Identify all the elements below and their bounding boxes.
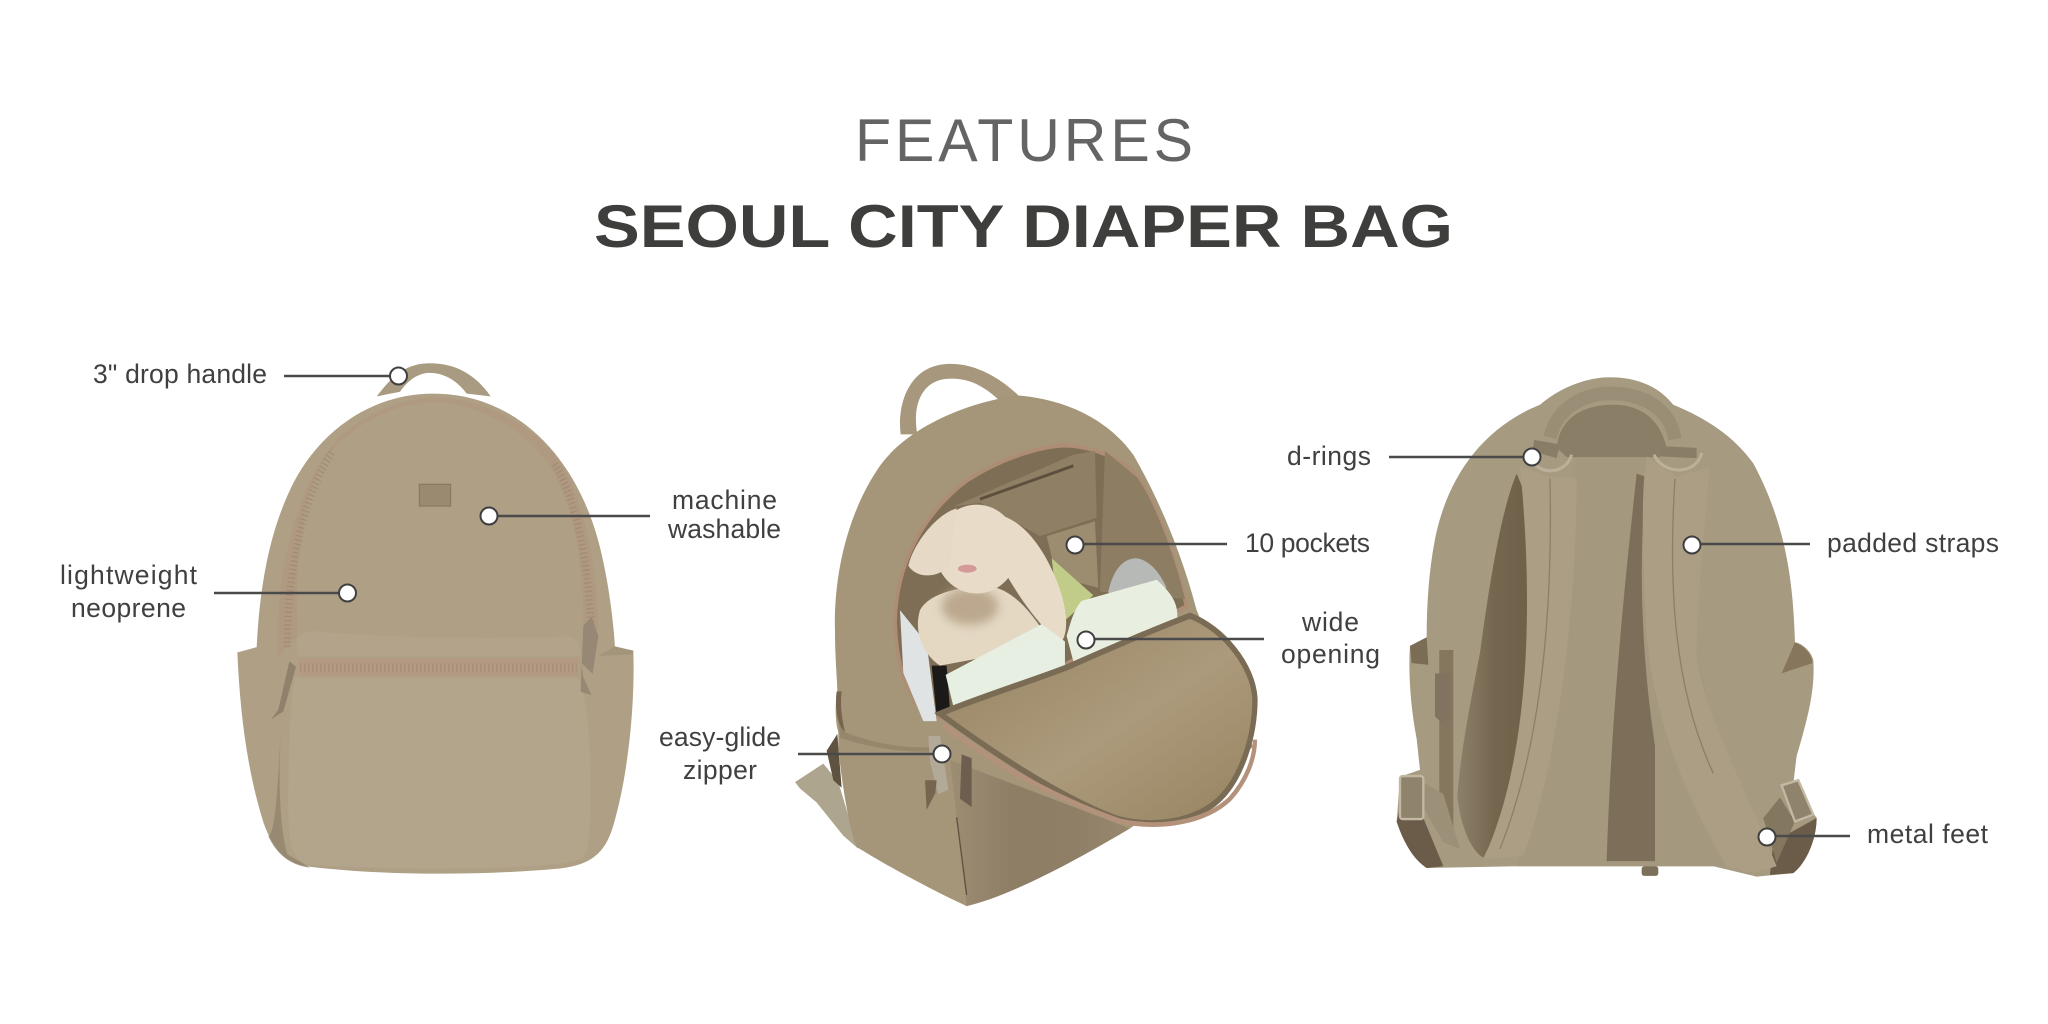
left d-ring [1530, 440, 1572, 471]
bunny toy [908, 505, 1066, 666]
body [237, 394, 634, 874]
callout: wide opening [1078, 607, 1380, 669]
interior [895, 445, 1187, 717]
leader line [1767, 835, 1850, 837]
right zipper pull [581, 617, 598, 695]
wipes [1052, 558, 1093, 625]
side pocket lip [836, 692, 931, 752]
middle shadow gap [1607, 474, 1655, 861]
bunny right ear [990, 514, 1066, 642]
flap zipper [943, 725, 1255, 825]
handle [900, 364, 1019, 434]
marker [1684, 536, 1700, 554]
right zipper teeth [553, 461, 591, 622]
inner upper pocket edge [980, 466, 1073, 499]
left strap seam [1500, 479, 1550, 849]
top pocket roll [296, 631, 580, 656]
label line two: opening [1281, 639, 1380, 669]
left pocket opening [1410, 637, 1428, 665]
marker [934, 746, 950, 762]
feet dark left [1397, 808, 1443, 868]
title: features: FEATURES [855, 107, 1197, 174]
open view backpack [795, 364, 1255, 906]
exterior body [835, 396, 1253, 906]
bottom tab [1642, 866, 1658, 876]
callout: easy-glide zipper [659, 722, 950, 785]
callout: machine washable [480, 485, 781, 544]
back panel [1517, 458, 1747, 866]
right d-ring [1654, 446, 1702, 470]
leader line [798, 753, 942, 755]
label line one: machine [672, 485, 777, 515]
left tab [1533, 440, 1560, 458]
right strap seam [1673, 479, 1713, 773]
foot strap [795, 764, 858, 849]
inner back wall [953, 451, 1097, 536]
lower pocket [288, 677, 590, 869]
right tab [1659, 446, 1697, 458]
back view backpack [1397, 377, 1817, 877]
black item [932, 666, 950, 716]
label: metal feet [1867, 819, 1989, 849]
callout: lightweight neoprene [60, 560, 356, 623]
handle [377, 363, 491, 396]
pocket zipper [298, 659, 578, 676]
feet dark right [1770, 818, 1817, 875]
bunny nose [958, 565, 977, 573]
label line one: easy-glide [659, 722, 781, 752]
label: 3" drop handle [93, 359, 267, 389]
marker [1524, 448, 1540, 466]
label line one: lightweight [60, 560, 198, 590]
logo patch [419, 484, 451, 506]
pocket zipper teeth [300, 655, 577, 679]
label line one: wide [1301, 607, 1359, 637]
right ring [1654, 453, 1702, 470]
right diapers [1067, 580, 1177, 667]
leader line [1692, 543, 1810, 545]
callout: 10 pockets [1066, 528, 1370, 558]
left zipper teeth [287, 451, 333, 647]
lower front panel [950, 760, 1130, 906]
right pocket opening [1782, 642, 1812, 673]
marker [480, 508, 498, 524]
body [1397, 377, 1817, 877]
bunny head [935, 505, 1018, 593]
label: padded straps [1827, 528, 1999, 558]
seam [957, 817, 967, 895]
title: seoul city diaper bag: SEOUL CITY DIAPER BAG [594, 193, 1453, 260]
bunny left ear [908, 508, 957, 575]
label: d-rings [1287, 441, 1371, 471]
marker [1758, 828, 1776, 846]
back zipper pull [1435, 673, 1449, 723]
front view backpack [237, 363, 634, 874]
inner right wall [1100, 451, 1185, 599]
dark back gusset [827, 734, 842, 788]
flap lining [940, 616, 1255, 823]
leader line [1086, 638, 1264, 640]
left diapers [946, 624, 1065, 706]
bunny belly [942, 588, 998, 625]
right buckle [1782, 780, 1813, 821]
label line two: neoprene [71, 593, 186, 623]
pocket opening [836, 692, 845, 732]
back zipper [1439, 650, 1453, 833]
leather pull tab [925, 780, 937, 810]
left shadow gap [1457, 474, 1530, 858]
label line two: zipper [683, 755, 757, 785]
inner back pocket [1047, 521, 1098, 588]
marker [1078, 632, 1094, 648]
handle recess [1557, 405, 1667, 457]
right strap [1643, 456, 1777, 873]
leader line [284, 375, 398, 377]
marker [390, 368, 407, 384]
left ring [1530, 455, 1572, 471]
main zipper [277, 397, 598, 658]
handle [1550, 393, 1675, 439]
white pack [900, 610, 937, 721]
right webbing [1763, 797, 1795, 863]
side pocket lip [598, 646, 633, 656]
left buckle [1400, 776, 1423, 819]
bottle [1108, 558, 1167, 606]
callout: metal feet [1758, 819, 1989, 849]
callout: padded straps [1684, 528, 1999, 558]
leader line [1389, 456, 1532, 458]
side seams [268, 719, 310, 868]
label: 10 pockets [1245, 528, 1370, 558]
second zipper pull [960, 754, 972, 807]
marker [1066, 536, 1084, 554]
left strap [1483, 467, 1577, 859]
callout: d-rings [1287, 441, 1540, 471]
left zipper pull [271, 661, 296, 719]
leader line [489, 515, 650, 517]
silver zipper pull [928, 736, 948, 794]
left webbing [1423, 784, 1460, 849]
leader line [1075, 543, 1227, 545]
label line two: washable [667, 514, 781, 544]
callout: 3 inch drop handle [93, 359, 407, 389]
leader line [214, 592, 347, 594]
bunny body [918, 587, 1047, 666]
marker [339, 584, 356, 602]
